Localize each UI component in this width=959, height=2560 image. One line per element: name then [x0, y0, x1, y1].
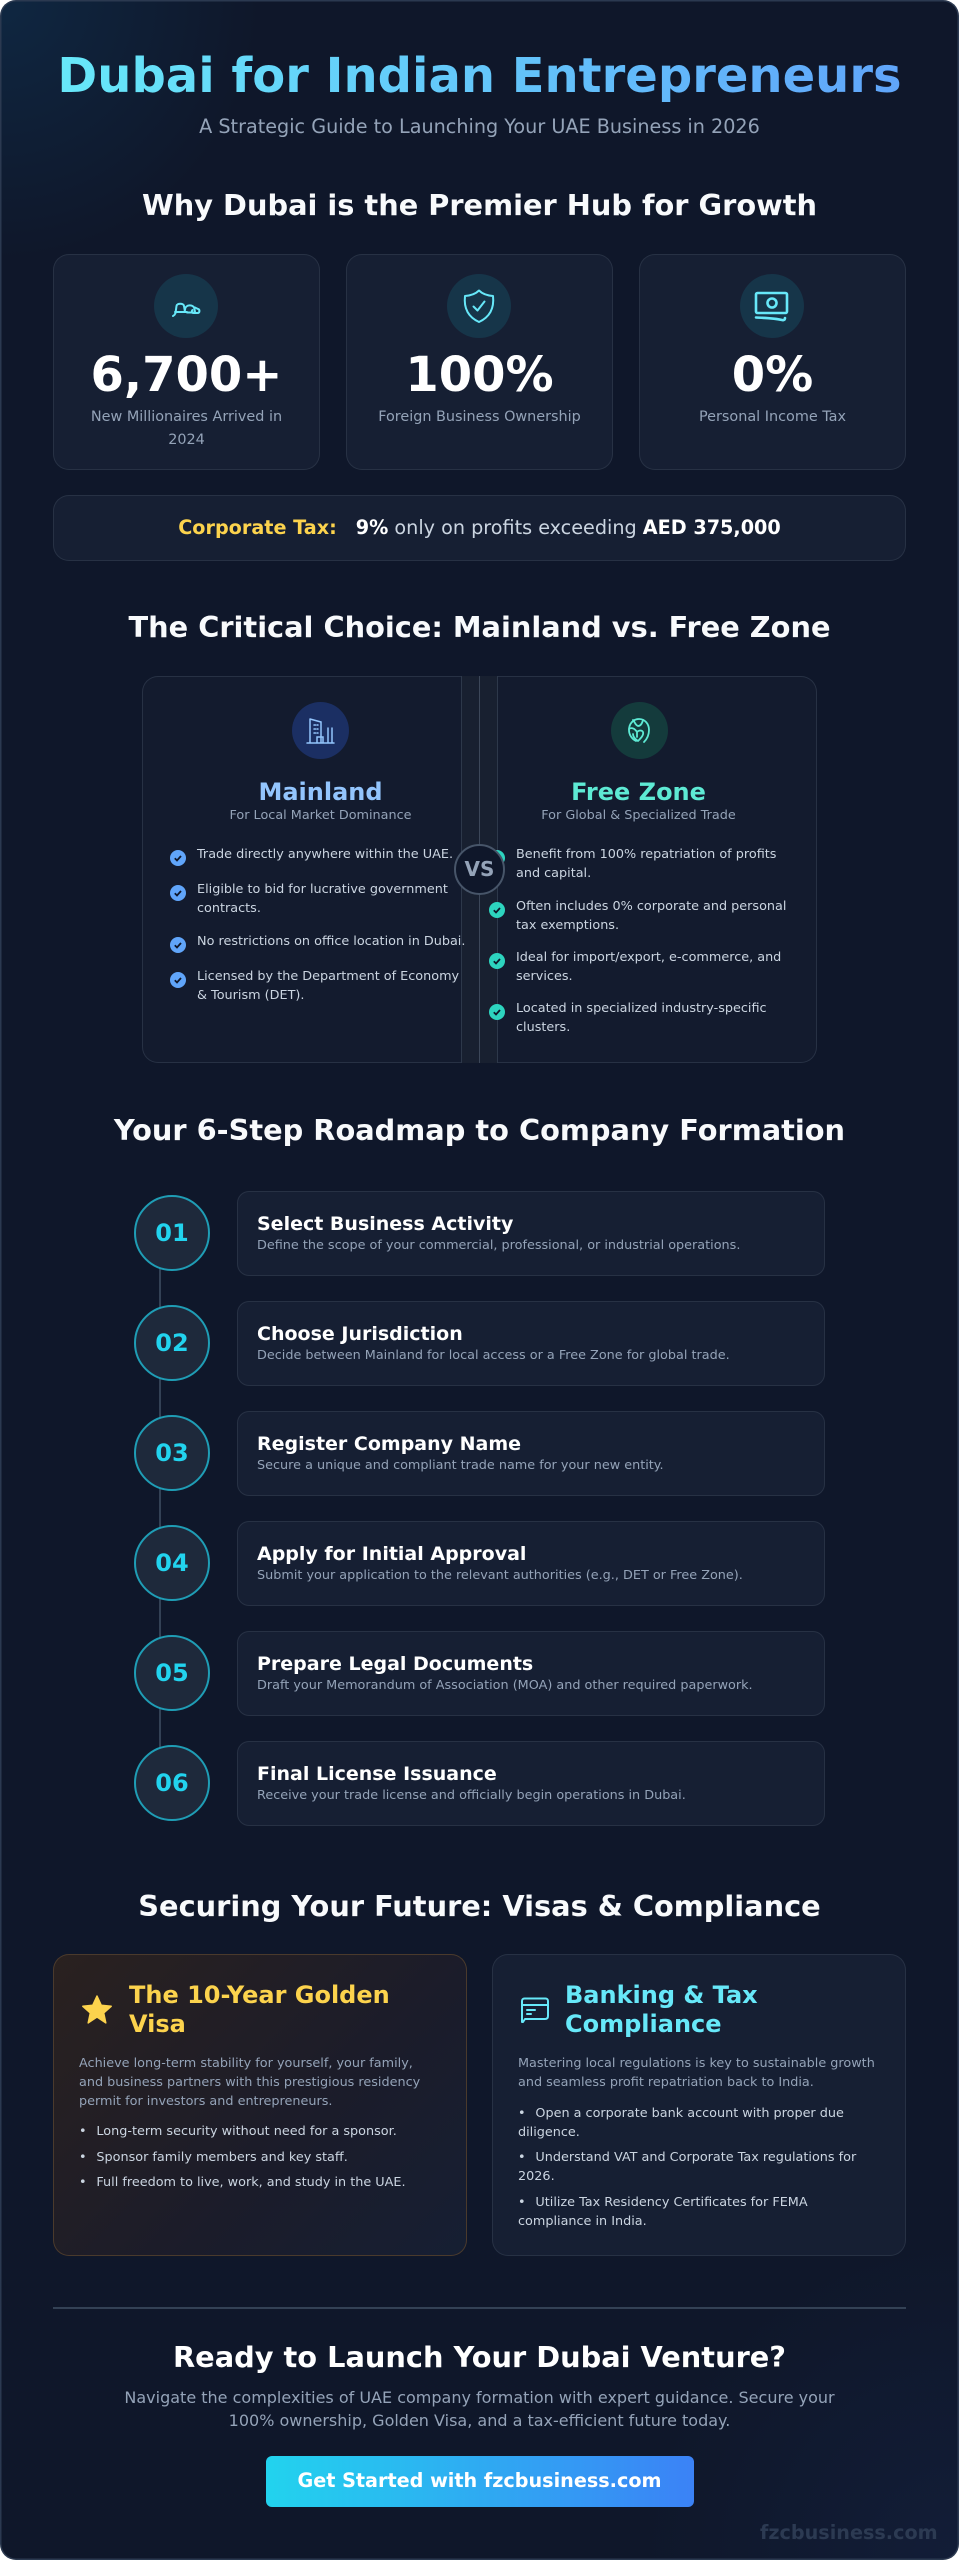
vs badge: VS: [465, 857, 494, 881]
checklist 1: diligence.: [518, 2125, 580, 2140]
mainland subtitle: For Local Market Dominance: [229, 808, 412, 823]
checklist 1: •: [518, 2106, 526, 2120]
stat value: 6,700+: [90, 347, 283, 403]
free zone list: Ideal for import/export, e-commerce, and: [516, 950, 781, 964]
heading: critical choice: The Critical Choice: Mainland vs. Free Zone: [129, 610, 830, 644]
icon: mainland building: [292, 702, 348, 759]
icon: shield check: [447, 274, 511, 338]
panel: stat ownership: [346, 254, 613, 470]
cta button: Get Started with fzcbusiness.com: [297, 2469, 662, 2492]
mainland item 4: [170, 969, 459, 1003]
benefit 3: Full freedom to live, work, and study in the UAE.: [96, 2175, 406, 2190]
golden visa description: [79, 2056, 420, 2109]
benefit 3: •: [79, 2175, 87, 2190]
step 5: [134, 1631, 825, 1716]
stat value: 100%: [405, 347, 554, 403]
step number: [134, 1525, 210, 1601]
mainland item 1: [170, 847, 453, 866]
panel: stat millionaires: [53, 254, 320, 470]
free zone list: clusters.: [516, 1020, 570, 1035]
golden visa description: permit for investors and entrepreneurs.: [79, 2094, 332, 2109]
icon: free zone globe: [611, 702, 668, 759]
icon: star: [82, 1995, 112, 2024]
benefit 1: Long-term security without need for a sponsor.: [96, 2124, 397, 2139]
step card: Secure a unique and compliant trade name for your new entity.: [257, 1458, 664, 1473]
callout text: Corporate Tax: 9% only on profits exceeding AED 375,000: [178, 516, 781, 539]
free zone title: Free Zone: [571, 778, 706, 806]
step number: [134, 1635, 210, 1711]
footer text: [124, 2388, 835, 2430]
heading: why dubai: Why Dubai is the Premier Hub for Growth: [142, 188, 817, 222]
step card: Select Business Activity: [257, 1213, 513, 1235]
banking title: Banking & Tax: [565, 1981, 758, 2009]
panel: stat income tax: [639, 254, 906, 470]
vs badge: [454, 844, 505, 895]
step card: Register Company Name: [257, 1433, 521, 1455]
free zone list: services.: [516, 969, 573, 984]
mainland item 3: [170, 934, 465, 953]
golden visa benefits: [79, 2124, 406, 2190]
icon: card: [521, 1998, 549, 2023]
callout: corporate tax: [53, 495, 906, 561]
panel: comparison: [142, 676, 817, 1063]
stat label: New Millionaires Arrived in: [91, 409, 282, 425]
checklist 2: 2026.: [518, 2169, 555, 2184]
free zone item 3: [489, 950, 781, 984]
banking title: Compliance: [565, 2010, 722, 2038]
icon: banknote: [740, 274, 804, 338]
step card: [236, 1191, 824, 1276]
banking description: Mastering local regulations is key to sustainable growth: [518, 2056, 875, 2071]
benefit 1: •: [79, 2124, 87, 2139]
step 4: [134, 1521, 825, 1606]
step card: Receive your trade license and officially begin operations in Dubai.: [257, 1788, 686, 1803]
step number: 05: [155, 1659, 189, 1687]
stat value: 0%: [732, 347, 813, 403]
step number: 03: [155, 1439, 189, 1467]
golden visa title: Visa: [129, 2010, 186, 2038]
checklist 2: •: [518, 2150, 526, 2165]
banking checklist: [518, 2106, 856, 2229]
step number: 01: [155, 1219, 189, 1247]
free zone item 2: [489, 898, 786, 933]
free zone list: Located in specialized industry-specific: [516, 1001, 767, 1016]
free zone list: tax exemptions.: [516, 918, 619, 933]
subtitle: A Strategic Guide to Launching Your UAE Business in 2026: [199, 115, 760, 138]
step card: Final License Issuance: [257, 1763, 497, 1785]
stat label: Foreign Business Ownership: [378, 409, 581, 425]
benefit 2: •: [79, 2150, 87, 2165]
mainland list: [170, 847, 465, 1003]
checklist 1: Open a corporate bank account with proper due: [535, 2106, 844, 2120]
step number: [134, 1745, 210, 1821]
step card: Define the scope of your commercial, professional, or industrial operations.: [257, 1238, 740, 1253]
free zone list: Benefit from 100% repatriation of profits: [516, 847, 776, 862]
step 6: [134, 1741, 825, 1826]
golden visa title: [129, 1981, 390, 2038]
golden visa description: and business partners with this prestigious residency: [79, 2075, 420, 2090]
benefit 2: Sponsor family members and key staff.: [96, 2150, 348, 2165]
timeline connector: [159, 1233, 161, 1783]
step card: Submit your application to the relevant authorities (e.g., DET or Free Zone).: [257, 1568, 743, 1583]
stat label: Personal Income Tax: [699, 409, 846, 425]
footer text: Navigate the complexities of UAE company formation with expert guidance. Secure your: [124, 2388, 835, 2407]
step card: Draft your Memorandum of Association (MOA) and other required paperwork.: [257, 1678, 753, 1693]
mainland list: Trade directly anywhere within the UAE.: [197, 847, 453, 862]
panel: golden visa: [53, 1954, 467, 2256]
step card: Decide between Mainland for local access or a Free Zone for global trade.: [257, 1348, 730, 1363]
free zone list: [489, 847, 786, 1035]
checklist 2: [518, 2150, 856, 2184]
banking description: and seamless profit repatriation back to India.: [518, 2075, 814, 2090]
mainland title: Mainland: [258, 778, 383, 806]
watermark: fzcbusiness.com: [760, 2521, 938, 2544]
title: Dubai for Indian Entrepreneurs: [57, 48, 902, 104]
step card: [236, 1741, 824, 1826]
step 1: [134, 1191, 825, 1276]
checklist 1: [518, 2106, 844, 2140]
checklist 3: compliance in India.: [518, 2214, 647, 2229]
step card: [236, 1411, 824, 1496]
icon: people: [154, 274, 218, 338]
step number: [134, 1195, 210, 1271]
stat label: [91, 409, 282, 448]
mainland item 2: [170, 882, 448, 916]
banking description: [518, 2056, 875, 2090]
banking title: [565, 1981, 758, 2038]
checklist 3: [518, 2194, 808, 2229]
footer text: 100% ownership, Golden Visa, and a tax-efficient future today.: [229, 2411, 730, 2430]
step number: [134, 1305, 210, 1381]
heading: roadmap: Your 6-Step Roadmap to Company Formation: [114, 1113, 845, 1147]
footer heading: Ready to Launch Your Dubai Venture?: [173, 2340, 786, 2374]
free zone list: and capital.: [516, 866, 591, 881]
golden visa description: Achieve long-term stability for yourself, your family,: [79, 2056, 413, 2071]
mainland list: No restrictions on office location in Dubai.: [197, 934, 465, 949]
checklist 2: Understand VAT and Corporate Tax regulations for: [535, 2150, 856, 2165]
free zone item 4: [489, 1001, 767, 1035]
step card: Apply for Initial Approval: [257, 1543, 526, 1565]
step card: Prepare Legal Documents: [257, 1653, 533, 1675]
mainland list: & Tourism (DET).: [197, 988, 304, 1003]
step number: 06: [155, 1769, 189, 1797]
step card: Choose Jurisdiction: [257, 1323, 463, 1345]
step number: [134, 1415, 210, 1491]
mainland list: Eligible to bid for lucrative government: [197, 882, 448, 897]
step 3: [134, 1411, 825, 1496]
step card: [236, 1631, 824, 1716]
cta button: [266, 2456, 694, 2507]
stat label: 2024: [168, 432, 205, 448]
free zone list: Often includes 0% corporate and personal: [516, 898, 786, 914]
step card: [236, 1301, 824, 1386]
panel: banking and tax: [492, 1954, 906, 2256]
checklist 3: Utilize Tax Residency Certificates for FEMA: [535, 2194, 808, 2210]
center divider: [461, 676, 498, 1063]
mainland list: Licensed by the Department of Economy: [197, 969, 459, 984]
checklist 3: •: [518, 2194, 526, 2210]
free zone subtitle: For Global & Specialized Trade: [541, 808, 736, 823]
step number: 02: [155, 1329, 189, 1357]
step 2: [134, 1301, 825, 1386]
step number: 04: [155, 1549, 189, 1577]
step card: [236, 1521, 824, 1606]
mainland list: contracts.: [197, 901, 261, 916]
free zone item 1: [496, 847, 776, 881]
golden visa title: The 10-Year Golden: [129, 1981, 390, 2009]
heading: visas and compliance: Securing Your Future: Visas & Compliance: [138, 1889, 821, 1923]
